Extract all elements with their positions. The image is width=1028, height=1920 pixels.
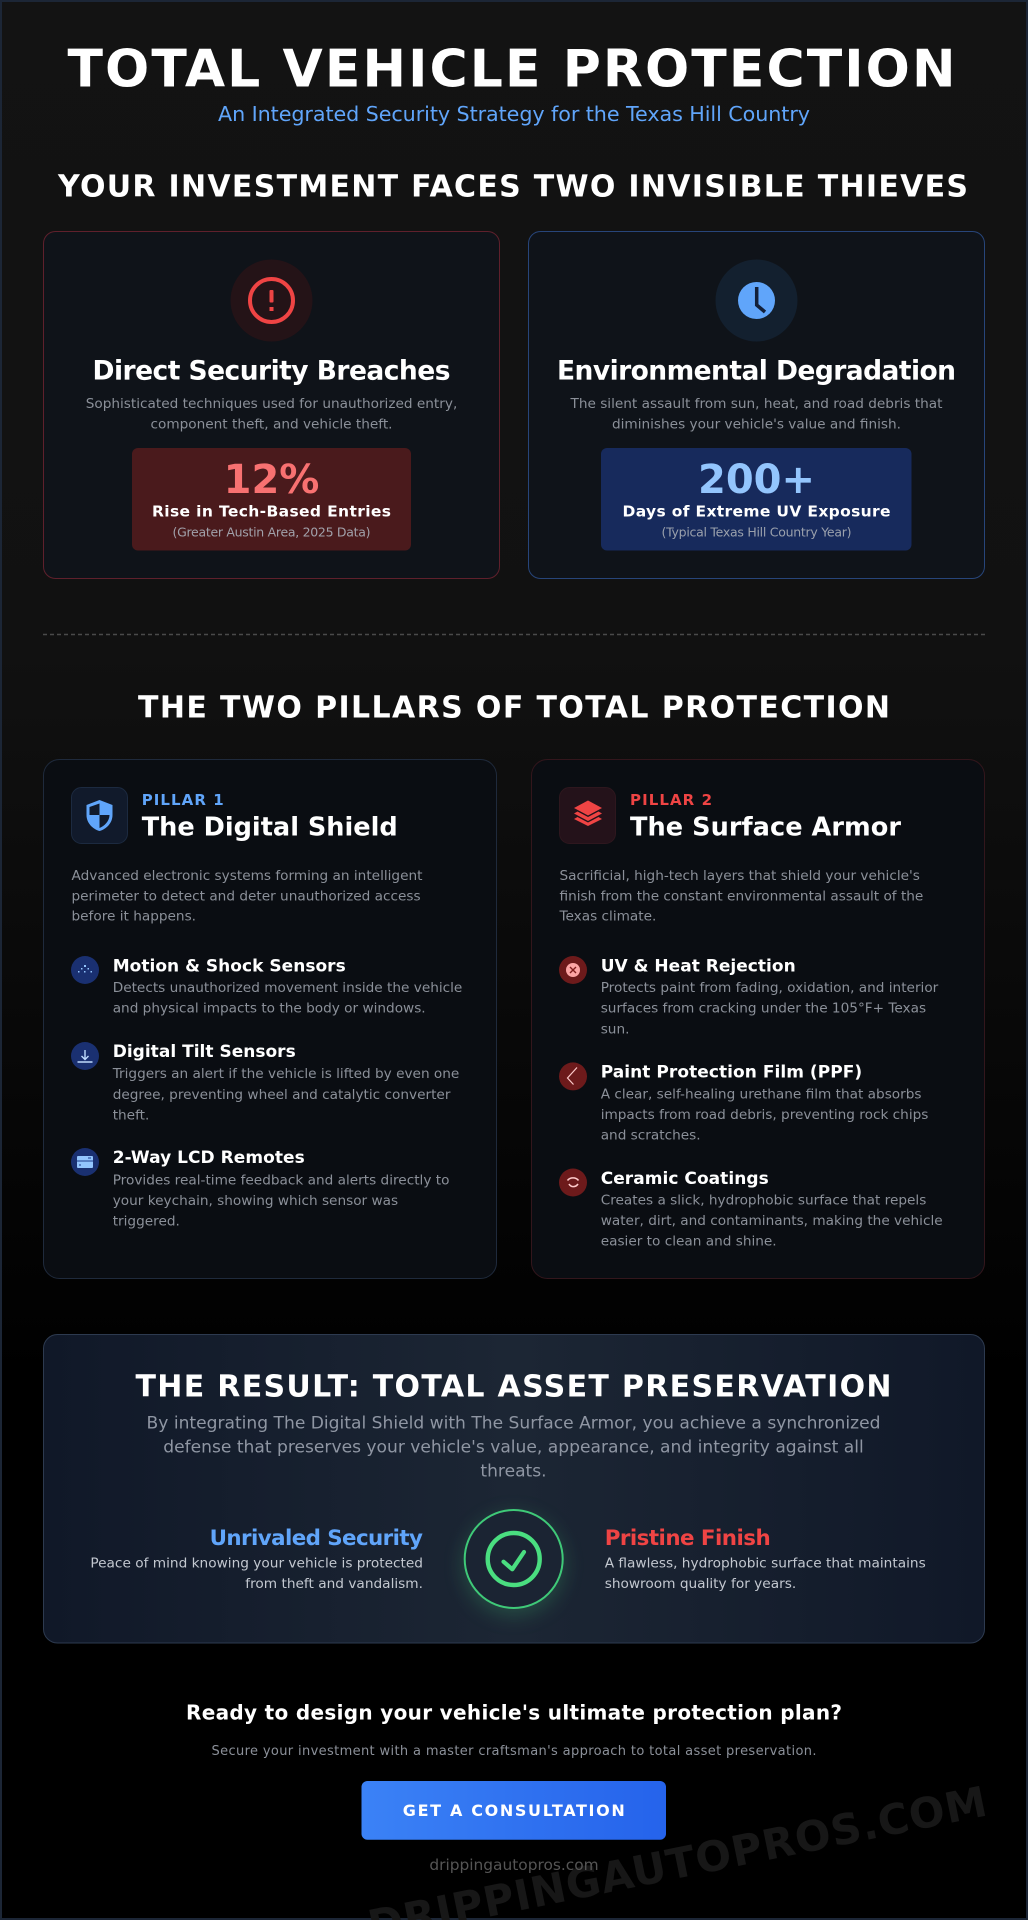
stat note: (Typical Texas Hill Country Year) [662,524,852,540]
pillar label: PILLAR 2 [630,791,712,809]
stat label: Days of Extreme UV Exposure [622,502,890,520]
item: UV and heat rejection [559,956,939,1037]
item text: surfaces from cracking under the 105°F+ Texas [601,1001,926,1017]
item: digital tilt sensors [71,1042,459,1123]
benefit title: Unrivaled Security [210,1526,423,1551]
benefit text: from theft and vandalism. [245,1576,423,1592]
heading: two pillars: THE TWO PILLARS OF TOTAL PROTECTION [138,690,890,726]
panel: direct security breaches [44,232,500,578]
icon: tilt [71,1042,99,1070]
CTA button: GET A CONSULTATION [403,1801,625,1820]
benefit: pristine finish [605,1526,926,1592]
item text: and physical impacts to the body or windows. [113,1001,426,1017]
item text: Detects unauthorized movement inside the vehicle [113,980,462,996]
stat value: 200+ [698,457,815,503]
benefit text: A flawless, hydrophobic surface that maintains [605,1556,926,1572]
item text: sun. [601,1021,629,1037]
header [68,40,956,126]
benefit title: Pristine Finish [605,1526,771,1551]
CTA heading: Ready to design your vehicle's ultimate protection plan? [186,1700,842,1724]
item text: your keychain, showing which sensor was [113,1193,398,1209]
stat note: (Greater Austin Area, 2025 Data) [172,524,370,540]
item title: UV & Heat Rejection [601,956,796,976]
icon: layers [560,788,616,844]
pillar intro: perimeter to detect and deter unauthorized access [72,888,421,904]
item text: Protects paint from fading, oxidation, and interior [601,980,939,996]
icon: UV [559,956,587,984]
item text: easier to clean and shine. [601,1234,777,1250]
icon: green check [465,1510,563,1608]
item text: Creates a slick, hydrophobic surface that repels [601,1192,926,1208]
icon: ceramic [559,1168,587,1196]
icon: shield [72,788,128,844]
item: paint protection film [559,1062,928,1143]
item text: A clear, self-healing urethane film that absorbs [601,1086,922,1102]
panel: pillar 2 [532,760,984,1278]
item text: theft. [113,1107,149,1123]
result text: threats. [480,1461,547,1481]
subtitle: An Integrated Security Strategy for the Texas Hill Country [218,102,810,126]
panel: pillar 1 [44,760,496,1278]
card text: diminishes your vehicle's value and finish. [612,416,901,432]
heading: two invisible thieves: YOUR INVESTMENT FACES TWO INVISIBLE THIEVES [57,170,968,204]
benefit text: showroom quality for years. [605,1576,796,1592]
item text: impacts from road debris, preventing rock chips [601,1107,928,1123]
result title: THE RESULT: TOTAL ASSET PRESERVATION [136,1370,892,1405]
item text: and scratches. [601,1127,701,1143]
stat box [601,448,912,550]
item text: degree, preventing wheel and catalytic converter [113,1087,451,1103]
item title: Ceramic Coatings [601,1169,769,1189]
benefit text: Peace of mind knowing your vehicle is protected [90,1556,423,1572]
pillar title: The Digital Shield [142,812,398,842]
item text: Triggers an alert if the vehicle is lifted by even one [112,1066,459,1082]
pillar intro: Texas climate. [558,909,656,925]
benefit: unrivaled security [90,1526,423,1592]
pillar intro: Sacrificial, high-tech layers that shield your vehicle's [560,868,920,884]
title: TOTAL VEHICLE PROTECTION [68,40,956,100]
item: ceramic coatings [559,1168,943,1250]
item title: Digital Tilt Sensors [113,1042,296,1062]
icon: clock [716,260,798,342]
item title: Paint Protection Film (PPF) [601,1062,862,1082]
pillar intro: finish from the constant environmental assault of the [560,888,923,904]
item text: triggered. [113,1213,180,1229]
item text: water, dirt, and contaminants, making the vehicle [601,1213,943,1229]
icon: remote [71,1148,99,1176]
result text: By integrating The Digital Shield with The Surface Armor, you achieve a synchronized [147,1413,880,1433]
icon: motion [71,956,99,984]
item text: Provides real-time feedback and alerts directly to [113,1172,449,1188]
item: motion and shock sensors [71,956,462,1017]
card text: The silent assault from sun, heat, and road debris that [570,396,943,412]
card title: Environmental Degradation [557,356,956,386]
pillar intro: before it happens. [72,909,196,925]
call to action [186,1700,842,1874]
CTA button [362,1781,666,1840]
result text: defense that preserves your vehicle's value, appearance, and integrity against all [163,1437,864,1457]
website: drippingautopros.com [429,1856,599,1874]
icon: alert [230,260,312,342]
stat box [132,448,411,550]
pillar label: PILLAR 1 [142,791,224,809]
card title: Direct Security Breaches [92,356,450,386]
panel: environmental degradation [528,232,984,578]
stat value: 12% [224,457,319,503]
card text: Sophisticated techniques used for unauthorized entry, [86,396,457,412]
card text: component theft, and vehicle theft. [150,416,393,432]
item title: Motion & Shock Sensors [113,956,346,976]
panel: the result [44,1334,984,1643]
pillar title: The Surface Armor [630,812,901,842]
icon: film [559,1062,587,1090]
item: 2-way LCD remotes [71,1148,449,1229]
pillar intro: Advanced electronic systems forming an intelligent [72,868,423,884]
CTA text: Secure your investment with a master craftsman's approach to total asset preservation. [212,1744,816,1759]
item title: 2-Way LCD Remotes [113,1148,305,1168]
stat label: Rise in Tech-Based Entries [152,502,391,520]
